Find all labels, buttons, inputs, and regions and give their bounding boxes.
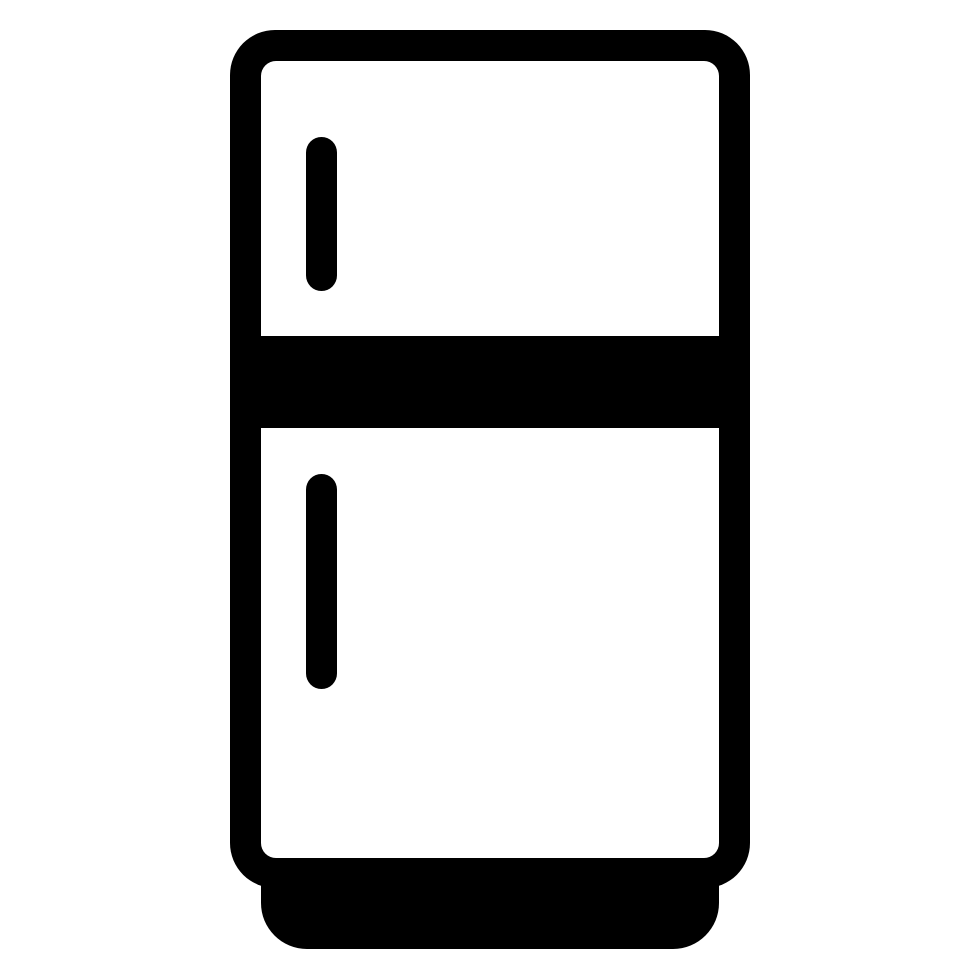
upper door	[261, 61, 719, 336]
lower door	[261, 428, 719, 858]
lower door handle	[306, 474, 337, 689]
upper door handle	[306, 137, 337, 291]
refrigerator base	[261, 870, 719, 949]
refrigerator body outline	[230, 30, 750, 888]
